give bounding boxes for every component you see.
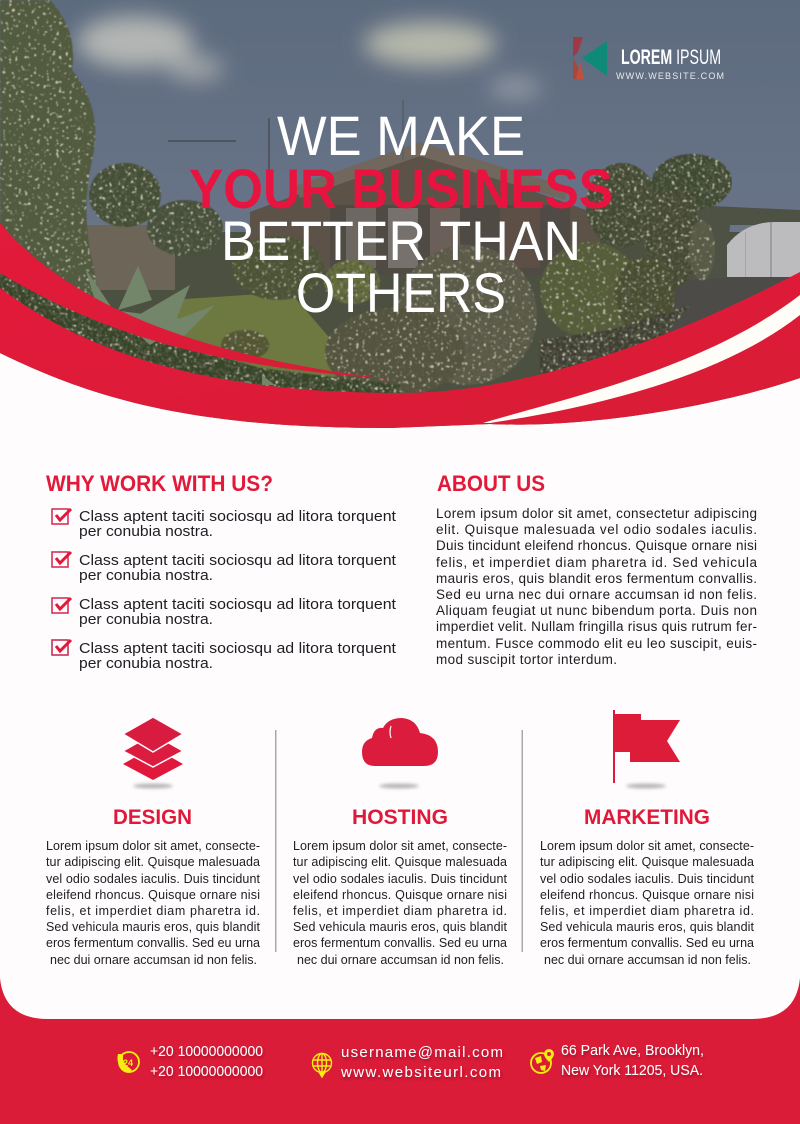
heading: about us: ABOUT US [437,471,545,496]
panel: about us [436,471,757,667]
white page area under the banner [0,353,800,1124]
list item 3 [52,597,396,628]
contact: web: username@mail.com [341,1044,503,1061]
list item 3: per conubia nostra. [79,612,213,628]
foliage [0,0,732,400]
about us paragraph: mentum. Fusce commodo elit eu leo suscipit, euis- [436,636,757,651]
design text: Sed vehicula mauris eros, quis blandit [46,920,261,934]
about us paragraph: imperdiet velit. Nullam fringilla risus quis rutrum fer- [436,619,757,634]
hosting text [293,839,508,967]
logo [573,37,724,81]
about us paragraph: Lorem ipsum dolor sit amet, consectetur adipiscing [436,506,757,521]
contact: address: New York 11205, USA. [561,1062,703,1079]
marketing text [540,839,755,967]
icon: map pin globe [531,1049,554,1073]
contact: web [340,1044,503,1081]
design text: nec dui ornare accumsan id non felis. [50,953,257,967]
design text [46,839,261,967]
design text: eros fermentum convallis. Sed eu urna [46,936,260,950]
contact: phones: +20 10000000000 [150,1043,263,1060]
agave plant [85,266,275,385]
marketing text: Sed vehicula mauris eros, quis blandit [540,920,755,934]
list item 4: Class aptent taciti sociosqu ad litora torquent [79,641,396,657]
about us paragraph: mauris eros, quis blandit eros fermentum convallis. [436,571,757,586]
contact: web: www.websiteurl.com [340,1064,501,1081]
hosting text: eros fermentum convallis. Sed eu urna [293,936,507,950]
list item 2 [52,552,396,584]
panel: marketing [540,710,755,967]
hero title: OTHERS [296,261,506,324]
heading: hosting: HOSTING [352,806,448,829]
hero title: WE MAKE [277,104,525,167]
marketing text: nec dui ornare accumsan id non felis. [544,953,751,967]
marketing text: Lorem ipsum dolor sit amet, consecte- [540,839,754,853]
heading: why work with us: WHY WORK WITH US? [46,471,273,496]
hosting text: eleifend rhoncus. Quisque ornare nisi [293,888,507,902]
hosting text: vel odio sodales iaculis. Duis tincidunt [293,872,508,886]
icon: 24 hour phone: 24 [123,1058,133,1068]
hero title [189,104,613,324]
hosting text: felis, et imperdiet diam pharetra id. [293,904,507,918]
white streak in band [483,295,800,423]
about us paragraph: mod suscipit tortor interdum. [436,652,617,667]
about us paragraph: Duis tincidunt eleifend rhoncus. Quisque ornare nisi [436,538,757,553]
heading: marketing: MARKETING [584,806,710,829]
icon: 24 hour phone [117,1052,139,1073]
marketing text: felis, et imperdiet diam pharetra id. [540,904,754,918]
design text: felis, et imperdiet diam pharetra id. [46,904,260,918]
about us paragraph: Sed eu urna nec dui ornare accumsan id non felis. [436,587,757,602]
hosting text: tur adipiscing elit. Quisque malesuada [293,855,507,869]
list item 4 [52,640,396,672]
hero title: BETTER THAN [221,209,581,272]
heading: design: DESIGN [113,806,192,829]
hosting text: Sed vehicula mauris eros, quis blandit [293,920,508,934]
logo: LOREM IPSUM [621,46,721,69]
icon: layers [123,717,183,788]
icon: globe pin [312,1053,332,1077]
list item 3: Class aptent taciti sociosqu ad litora torquent [79,597,396,613]
hosting text: nec dui ornare accumsan id non felis. [297,953,504,967]
about us paragraph: felis, et imperdiet diam pharetra id. Sed vehicula [436,555,757,570]
list item 2: Class aptent taciti sociosqu ad litora torquent [79,553,396,569]
hero title: YOUR BUSINESS [189,157,613,220]
panel: design [46,717,261,967]
about us paragraph: elit. Quisque malesuada vel odio sodales iaculis. [436,522,757,537]
marketing text: tur adipiscing elit. Quisque malesuada [540,855,754,869]
panel: hosting [293,718,508,967]
list item 1: per conubia nostra. [79,524,213,540]
panel: why work with us [46,471,396,672]
list item 2: per conubia nostra. [79,568,213,584]
ground base [0,232,800,432]
house [168,100,600,275]
footer band [0,978,800,1124]
contact: phones [150,1043,263,1080]
list item 1 [52,509,396,540]
hosting text: Lorem ipsum dolor sit amet, consecte- [293,839,507,853]
design text: eleifend rhoncus. Quisque ornare nisi [46,888,260,902]
main red band [0,272,800,428]
icon: flag [613,710,680,788]
design text: vel odio sodales iaculis. Duis tincidunt [46,872,261,886]
logo: WWW.WEBSITE.COM [616,71,724,81]
contact: address: 66 Park Ave, Brooklyn, [561,1042,704,1059]
design text: Lorem ipsum dolor sit amet, consecte- [46,839,260,853]
marketing text: vel odio sodales iaculis. Duis tincidunt [540,872,755,886]
about us paragraph [436,506,757,667]
gate and driveway [620,205,800,375]
contact: address [561,1042,704,1079]
hero photo: house and garden [0,0,800,432]
icon: cloud [362,718,438,788]
about us paragraph: Aliquam feugiat ut nunc bibendum porta. Duis non [436,603,757,618]
marketing text: eleifend rhoncus. Quisque ornare nisi [540,888,754,902]
design text: tur adipiscing elit. Quisque malesuada [46,855,260,869]
top red swoosh [0,223,390,379]
list item 1: Class aptent taciti sociosqu ad litora torquent [79,509,396,525]
contact: phones: +20 10000000000 [150,1063,263,1080]
marketing text: eros fermentum convallis. Sed eu urna [540,936,754,950]
lawn [170,292,340,392]
list item 4: per conubia nostra. [79,656,213,672]
